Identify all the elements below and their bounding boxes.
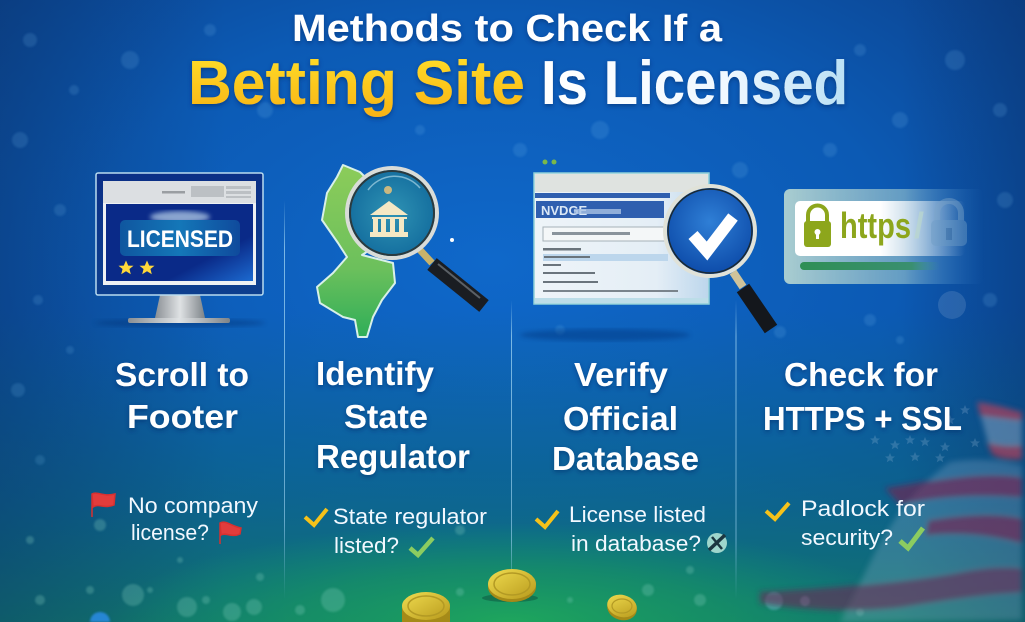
coin (402, 592, 450, 622)
heading: Regulator (316, 438, 470, 475)
heading: State (344, 398, 428, 435)
magnifier handle (420, 250, 432, 263)
icon: check mark (693, 217, 733, 251)
title (188, 8, 848, 118)
column 4: check for https + ssl (763, 356, 962, 550)
icon: https bar (784, 189, 984, 319)
coin (488, 569, 536, 602)
body text: License listed (569, 502, 706, 527)
body text (128, 493, 258, 545)
heading: Database (552, 440, 699, 477)
body text: in database? (571, 531, 701, 556)
title line 2: Is Licensed (541, 49, 848, 118)
heading: Verify (574, 356, 669, 393)
magnifier handle (733, 272, 743, 287)
title line 2: Betting Site (188, 49, 525, 118)
body text: security? (801, 525, 893, 550)
icon: sparkle (450, 238, 454, 242)
body text: listed? (334, 533, 399, 558)
heading: Scroll to (115, 356, 249, 393)
heading: Footer (127, 398, 238, 435)
US flag (760, 402, 1022, 622)
icon: yellow check (305, 509, 327, 525)
icon: gold coins (402, 569, 640, 622)
icon: https bar: / (914, 205, 924, 246)
column 2: identify state regulator (305, 355, 487, 558)
column 1: scroll to footer (92, 356, 258, 545)
heading: HTTPS + SSL (763, 400, 962, 437)
magnifier lens (665, 186, 755, 276)
coin (604, 591, 640, 622)
icon: green check (900, 528, 923, 548)
body text (801, 496, 925, 550)
faded padlock (931, 201, 967, 319)
body text: No company (128, 493, 258, 518)
state map (317, 165, 395, 337)
title line 2 (188, 49, 848, 118)
browser window: NVDGE (541, 203, 588, 218)
column dividers (284, 200, 736, 600)
heading: Official (563, 400, 678, 437)
heading (316, 355, 470, 475)
flag stars (870, 405, 980, 462)
icon: browser database with magnifier (520, 160, 771, 341)
icon: monitor (95, 173, 265, 327)
column 3: verify official database (536, 356, 727, 556)
body text (569, 502, 706, 556)
icon: yellow check (766, 503, 789, 519)
body text: license? (131, 520, 209, 545)
heading (115, 356, 249, 435)
magnifier lens (347, 168, 437, 258)
icon: red flag (92, 493, 115, 517)
title line 1: Methods to Check If a (292, 8, 723, 50)
icon: https bar: https (840, 205, 911, 246)
icon: state map with magnifier (317, 165, 484, 337)
icon: red flag (220, 522, 241, 544)
icon: bank building (370, 201, 408, 237)
heading (552, 356, 699, 477)
browser window (534, 173, 709, 304)
body text: State regulator (333, 504, 487, 529)
icon: green check (410, 538, 433, 555)
padlock (804, 206, 831, 247)
body text (333, 504, 487, 558)
licensed badge (120, 220, 240, 256)
licensed badge: LICENSED (127, 226, 233, 253)
body text: Padlock for (801, 496, 925, 521)
heading: Check for (784, 356, 938, 393)
icon: crossed mark (707, 533, 727, 553)
stars (118, 260, 154, 274)
heading: Identify (316, 355, 435, 392)
icon: yellow check (536, 511, 558, 527)
heading (763, 356, 962, 437)
